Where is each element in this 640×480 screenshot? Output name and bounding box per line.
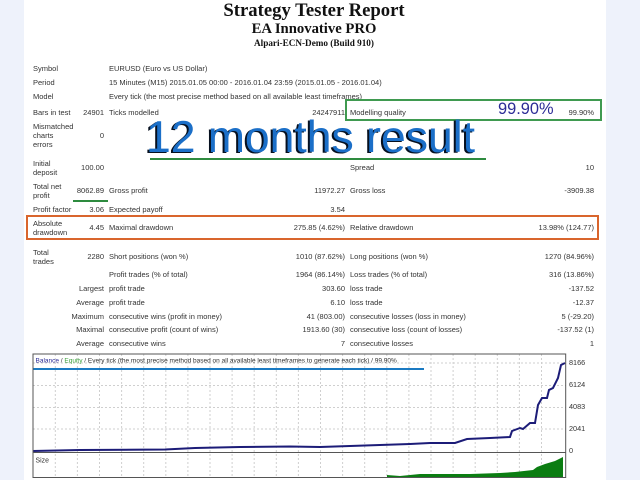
row: initial deposit and spread: 10 (586, 163, 594, 172)
row: total net profit and gross values (33, 182, 594, 200)
row: profit and loss trades: Loss trades (% of total) (350, 270, 427, 279)
row: total net profit and gross values: -3909.38 (564, 186, 594, 195)
row: bars and ticks: Bars in test (33, 108, 71, 116)
row: drawdown: 13.98% (124.77) (539, 222, 594, 232)
row: bars and ticks: 24901 (83, 108, 104, 116)
row: maximal consecutive: -137.52 (1) (557, 325, 594, 334)
row: maximal consecutive: consecutive profit (count of wins) (109, 325, 218, 334)
row: drawdown (33, 218, 594, 236)
row: profit factor and expected payoff: 3.54 (330, 204, 345, 214)
row: profit factor and expected payoff: Expected payoff (109, 204, 163, 214)
row: total trades and positions: Long positions (won %) (350, 252, 428, 260)
row: initial deposit and spread: deposit (33, 168, 57, 177)
row: total trades and positions (33, 248, 594, 266)
headline: 12 months result: 12 months result (146, 113, 475, 162)
row: profit factor and expected payoff: 3.06 (89, 204, 104, 214)
row: largest trade: -137.52 (569, 284, 594, 293)
row: maximal consecutive (76, 325, 594, 334)
chart frame (33, 354, 566, 478)
row: period: Period (33, 78, 55, 87)
row: total net profit and gross values: Gross profit (109, 186, 148, 195)
row: maximum consecutive: consecutive wins (profit in money) (109, 312, 222, 320)
legend underline (33, 368, 424, 370)
row: largest trade: Largest (79, 284, 104, 293)
callout: modelling quality box (345, 99, 602, 121)
row: symbol: Symbol (33, 64, 58, 73)
row: mismatched chart errors: errors (33, 140, 53, 148)
row: mismatched chart errors: Mismatched (33, 122, 73, 130)
row: profit and loss trades (109, 270, 594, 279)
row: average consecutive: 7 (341, 339, 345, 348)
row: bars and ticks: Ticks modelled (109, 108, 159, 116)
row: maximum consecutive: 41 (803.00) (307, 312, 345, 320)
row: symbol (33, 64, 207, 73)
row: drawdown: Relative drawdown (350, 222, 413, 232)
row: total net profit and gross values: Gross loss (350, 186, 385, 195)
chart: balance and equity (32, 354, 566, 478)
row: bars and ticks (33, 108, 594, 116)
subtitle: server and build: Alpari-ECN-Demo (Build 910) (254, 38, 374, 48)
row: average consecutive: consecutive wins (109, 339, 166, 348)
callout: large modelling quality figure: 99.90% (498, 100, 554, 118)
balance line (33, 363, 565, 451)
row: profit and loss trades: 316 (13.86%) (549, 270, 594, 279)
size area (387, 457, 563, 478)
row: total net profit and gross values: 8062.89 (77, 186, 104, 195)
axis label 6124: 6124 (569, 380, 585, 388)
row: average trade: -12.37 (573, 298, 594, 307)
row: model: Every tick (the most precise method based on all available least timeframes) (109, 92, 362, 100)
row: maximal consecutive: consecutive loss (count of losses) (350, 325, 462, 334)
size label: Size (36, 458, 49, 464)
row: largest trade: 303.60 (322, 284, 345, 293)
row: profit factor and expected payoff: Profit factor (33, 204, 71, 214)
row: profit and loss trades: 1964 (86.14%) (296, 270, 345, 279)
axis label 0: 0 (569, 446, 573, 454)
row: maximum consecutive: Maximum (71, 312, 104, 320)
row: average trade: loss trade (350, 298, 383, 307)
headline underline (150, 158, 486, 160)
row: largest trade (79, 284, 594, 293)
row: initial deposit and spread: Initial (33, 159, 51, 168)
row: total net profit and gross values: Total net (33, 182, 61, 191)
row: average consecutive (76, 339, 594, 348)
axis label 4083: 4083 (569, 402, 585, 410)
row: total trades and positions: 2280 (87, 252, 104, 260)
axis label 8166: 8166 (569, 358, 585, 366)
row: drawdown: 275.85 (4.62%) (294, 222, 345, 232)
row: total trades and positions: 1010 (87.62%) (296, 252, 345, 260)
row: maximum consecutive (71, 312, 594, 320)
row: maximal consecutive: Maximal (76, 325, 104, 334)
row: average consecutive: 1 (590, 339, 594, 348)
row: average trade: profit trade (109, 298, 145, 307)
row: profit factor and expected payoff (33, 204, 345, 214)
row: bars and ticks: 24247911 (312, 108, 345, 116)
row: maximum consecutive: 5 (-29.20) (561, 312, 594, 320)
row: largest trade: loss trade (350, 284, 383, 293)
row: initial deposit and spread: 100.00 (81, 163, 104, 172)
row: largest trade: profit trade (109, 284, 145, 293)
chart legend: Balance / Equity / Every tick (the most precise method based on all available least timeframes to generate each tick) / 99.90% (36, 358, 397, 364)
row: total net profit and gross values: profit (33, 191, 50, 200)
row: model: Model (33, 92, 53, 100)
row: average trade: 6.10 (330, 298, 345, 307)
row: drawdown: drawdown (33, 228, 67, 236)
row: average trade (76, 298, 594, 307)
title: Strategy Tester Report (223, 0, 405, 21)
row: mismatched chart errors (33, 122, 104, 148)
row: average trade: Average (76, 298, 104, 307)
row: maximal consecutive: 1913.60 (30) (302, 325, 345, 334)
row: total trades and positions: 1270 (84.96%) (545, 252, 594, 260)
row: profit and loss trades: Profit trades (% of total) (109, 270, 188, 279)
subtitle: EA name: EA Innovative PRO (252, 21, 376, 37)
row: drawdown: 4.45 (89, 222, 104, 232)
row: total net profit and gross values: 11972.27 (314, 186, 345, 195)
row: drawdown: Maximal drawdown (109, 222, 173, 232)
row: bars and ticks: Modelling quality (350, 108, 406, 116)
row: total trades and positions: Short positions (won %) (109, 252, 188, 260)
row: initial deposit and spread: Spread (350, 163, 374, 172)
net profit underline (73, 200, 108, 202)
text: 0 (100, 130, 104, 140)
row: average consecutive: consecutive losses (350, 339, 413, 348)
row: bars and ticks: 99.90% (569, 108, 594, 116)
row: maximum consecutive: consecutive losses (loss in money) (350, 312, 466, 320)
row: initial deposit and spread (33, 159, 594, 177)
axis label 2041: 2041 (569, 424, 585, 432)
row: period: 15 Minutes (M15) 2015.01.05 00:00 - 2016.01.04 23:59 (2015.01.05 - 2016.01.04) (109, 78, 382, 87)
callout: drawdown box (26, 214, 599, 240)
row: symbol: EURUSD (Euro vs US Dollar) (109, 64, 207, 73)
row: drawdown: Absolute (33, 218, 62, 228)
row: total trades and positions: Total (33, 248, 49, 256)
row: mismatched chart errors: charts (33, 130, 53, 140)
row: total trades and positions: trades (33, 256, 54, 266)
row: average consecutive: Average (76, 339, 104, 348)
